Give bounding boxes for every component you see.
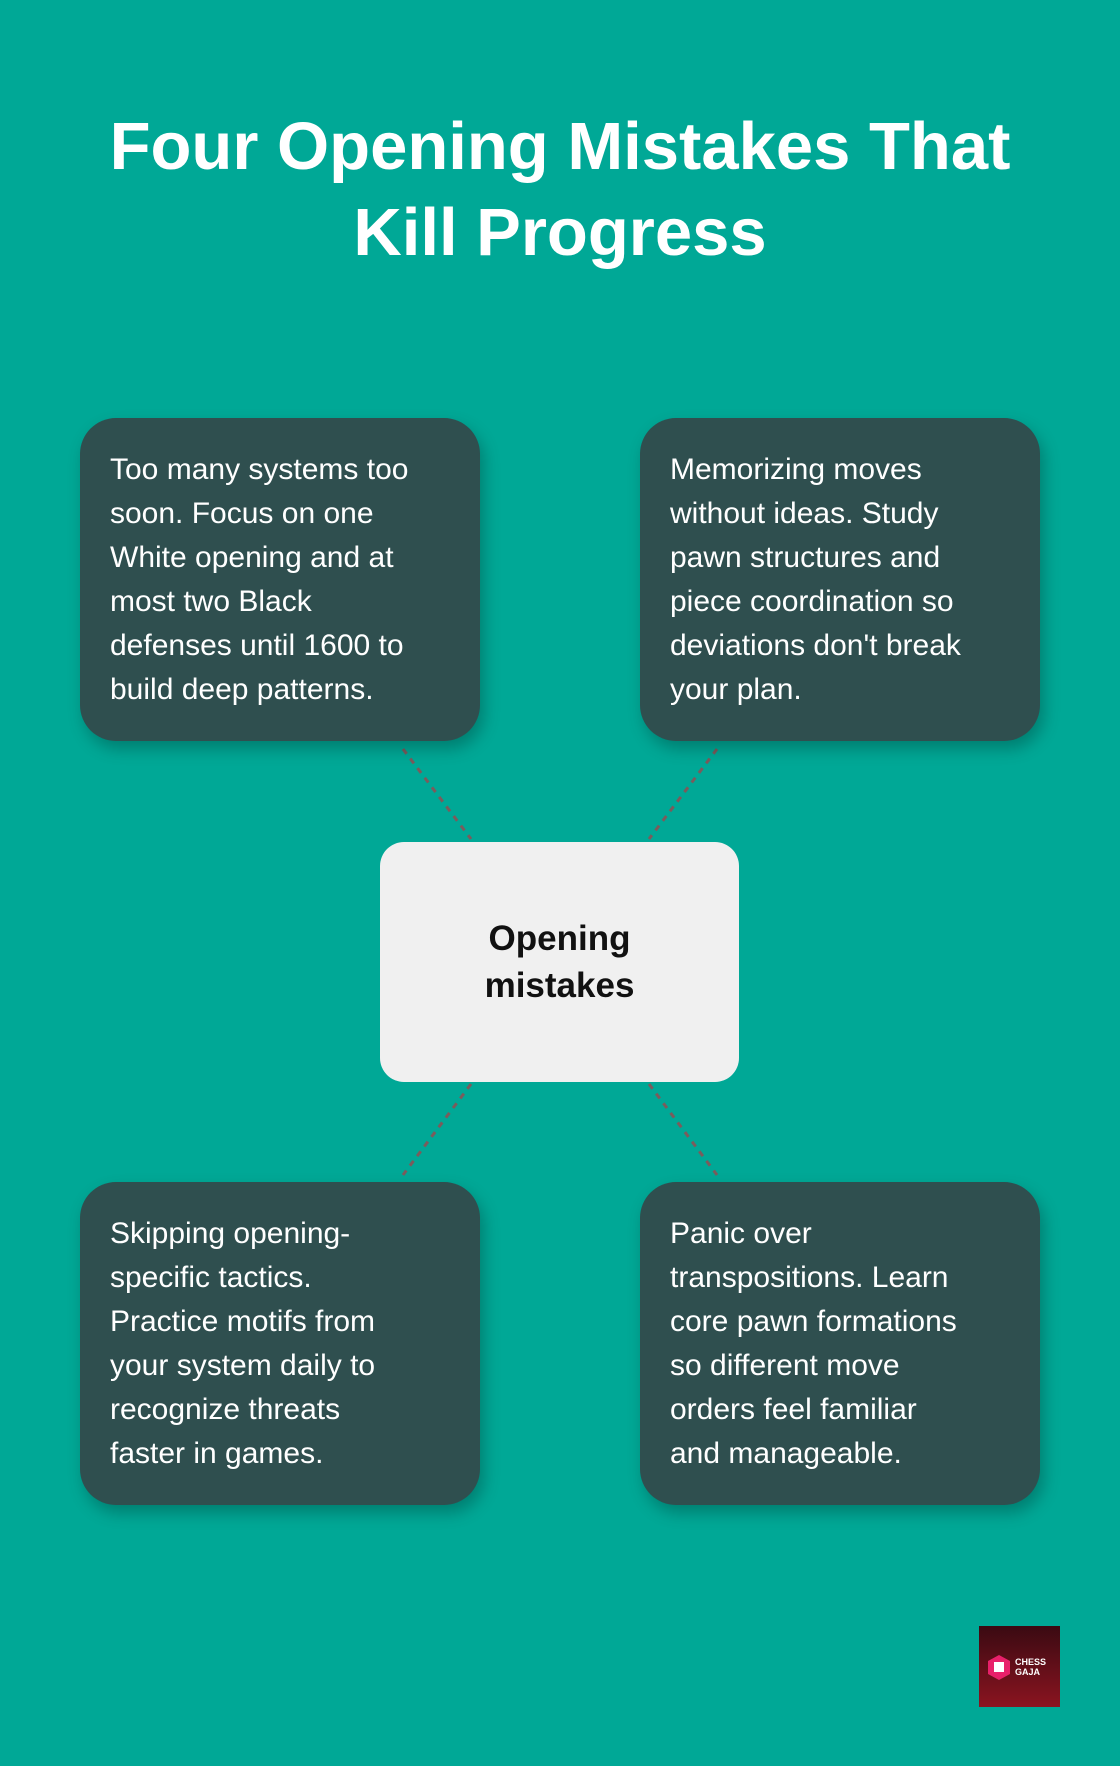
panel: too many systems: most two Black: [110, 585, 312, 618]
logo: chess gaja: [979, 1626, 1060, 1707]
panel: too many systems: defenses until 1600 to: [110, 629, 404, 662]
panel: panic over transpositions: and manageable.: [670, 1437, 902, 1470]
panel: skipping tactics: [80, 1182, 480, 1505]
title: [110, 109, 1010, 270]
panel: too many systems: [80, 418, 480, 741]
panel: skipping tactics: Practice motifs from: [110, 1305, 375, 1338]
panel: memorizing moves: [640, 418, 1040, 741]
title: Four Opening Mistakes That: [110, 109, 1010, 184]
center box: opening mistakes: mistakes: [485, 966, 634, 1005]
panel: panic over transpositions: Panic over: [670, 1217, 812, 1250]
logo: chess gaja: GAJA: [1015, 1667, 1040, 1677]
panel: panic over transpositions: core pawn formations: [670, 1305, 957, 1338]
panel: panic over transpositions: so different move: [670, 1349, 900, 1382]
panel: skipping tactics: your system daily to: [110, 1349, 375, 1382]
center box: opening mistakes: [380, 842, 739, 1082]
panel: too many systems: White opening and at: [110, 541, 394, 574]
panel: skipping tactics: recognize threats: [110, 1393, 340, 1426]
panel: skipping tactics: specific tactics.: [110, 1261, 312, 1294]
logo: chess gaja: CHESS: [1015, 1657, 1046, 1667]
panel: memorizing moves: without ideas. Study: [670, 497, 938, 530]
center box: opening mistakes: Opening: [489, 919, 630, 958]
panel: skipping tactics: Skipping opening-: [110, 1217, 350, 1250]
panel: memorizing moves: your plan.: [670, 673, 802, 706]
panel: memorizing moves: pawn structures and: [670, 541, 940, 574]
panel: too many systems: soon. Focus on one: [110, 497, 374, 530]
title: Kill Progress: [353, 195, 767, 270]
panel: too many systems: build deep patterns.: [110, 673, 374, 706]
panel: memorizing moves: Memorizing moves: [670, 453, 922, 486]
panel: panic over transpositions: [640, 1182, 1040, 1505]
panel: panic over transpositions: transpositions. Learn: [670, 1261, 948, 1294]
panel: skipping tactics: faster in games.: [110, 1437, 323, 1470]
panel: too many systems: Too many systems too: [110, 453, 408, 486]
panel: panic over transpositions: orders feel familiar: [670, 1393, 917, 1426]
panel: memorizing moves: piece coordination so: [670, 585, 954, 618]
panel: memorizing moves: deviations don't break: [670, 629, 961, 662]
